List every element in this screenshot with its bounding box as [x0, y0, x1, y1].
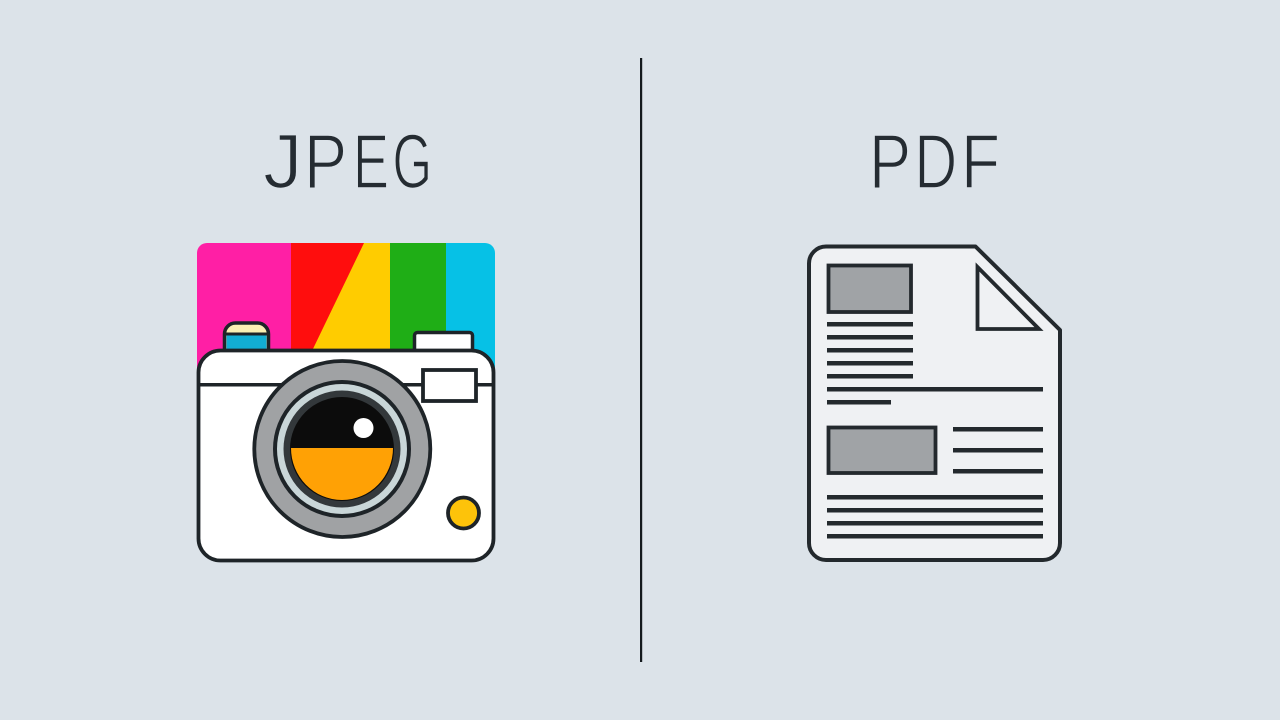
heading: PDF: P	[869, 118, 911, 204]
text lines beside lower image	[953, 427, 1043, 474]
camera body band line	[199, 383, 493, 386]
icon: JPEG camera	[197, 243, 495, 560]
heading: PDF: F	[961, 118, 1000, 204]
rainbow colour stripes	[197, 243, 495, 380]
page outline	[809, 246, 1060, 560]
left camera dial	[224, 323, 268, 352]
divider between JPEG and PDF	[640, 58, 642, 662]
lens	[254, 361, 430, 537]
heading: JPEG: E	[353, 120, 389, 205]
viewfinder	[423, 370, 476, 401]
heading: JPEG: G	[392, 118, 432, 205]
folded corner	[978, 267, 1039, 329]
text lines under top image	[827, 322, 1043, 404]
heading: PDF	[869, 118, 1000, 205]
heading: JPEG	[263, 118, 432, 205]
yellow button	[448, 498, 479, 528]
camera body	[198, 350, 494, 560]
bottom text lines	[827, 495, 1043, 538]
top image placeholder	[828, 266, 911, 312]
heading: JPEG: P	[304, 120, 347, 205]
icon: PDF document	[809, 246, 1060, 560]
heading: PDF: D	[914, 119, 957, 205]
right camera shutter	[414, 332, 472, 352]
lower image placeholder	[828, 428, 936, 473]
heading: JPEG: J	[263, 118, 303, 205]
